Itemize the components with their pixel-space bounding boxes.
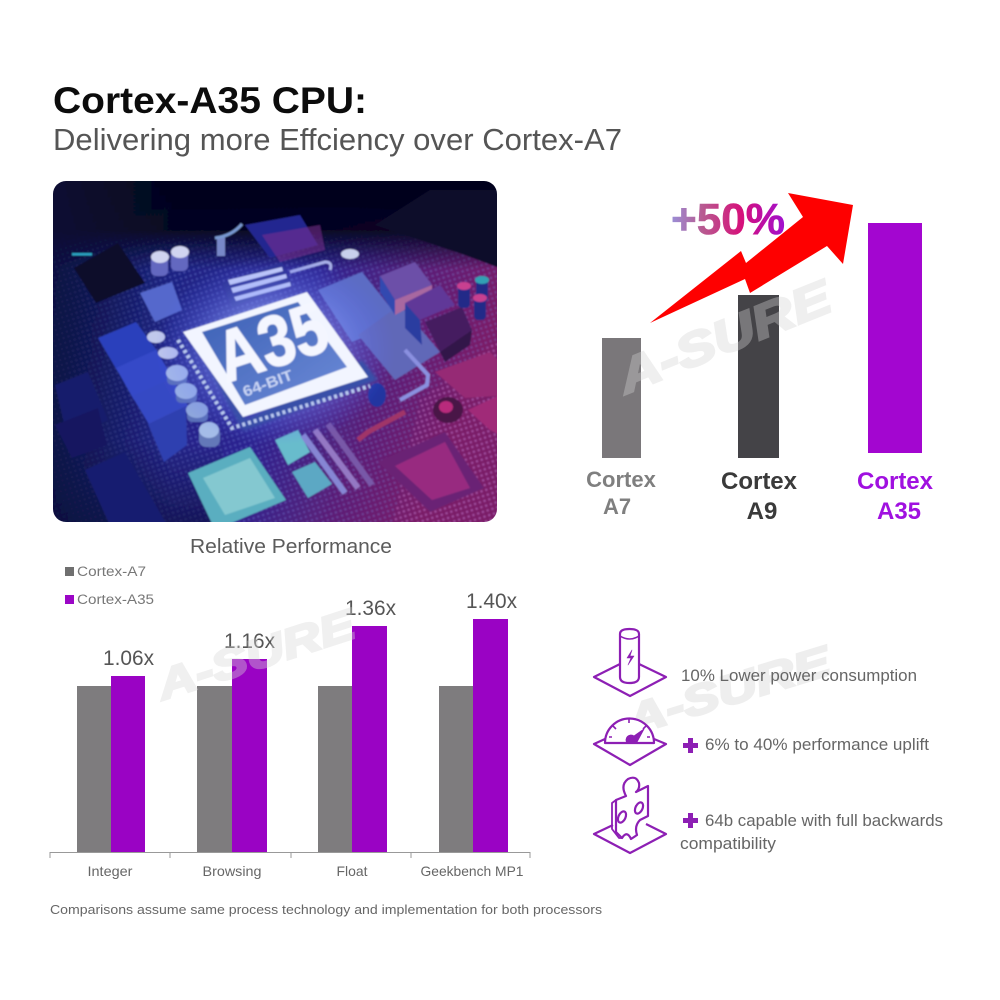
watermark top: A-SURE (609, 269, 840, 404)
label: Cortex A9 (721, 468, 798, 525)
watermark bottom left: A-SURE (150, 600, 363, 709)
chip frame (183, 292, 368, 417)
heat sinks right of chip (318, 272, 402, 342)
transistor (368, 383, 386, 407)
chart title: Relative Performance (190, 536, 392, 558)
teal chip bottom (188, 447, 286, 530)
label: Cortex A7: Cortex (586, 467, 657, 492)
text: lower power: 10% Lower power consumption (681, 667, 917, 685)
pink right chips (435, 352, 497, 398)
group: Integer bars (77, 647, 154, 852)
illustration: A35 circuit board (53, 181, 497, 522)
icon: battery (594, 629, 666, 696)
chip pins (178, 340, 370, 428)
chip glow (162, 260, 384, 438)
capacitors top (151, 246, 189, 276)
top right dark block (376, 190, 497, 268)
label: Cortex A35: A35 (877, 498, 921, 525)
small block (140, 282, 182, 322)
text: performance uplift: 6% to 40% performance uplift (705, 736, 929, 754)
group: Geekbench bars (439, 590, 517, 852)
label: Cortex A7: A7 (603, 494, 631, 519)
chip label A35: A35 (206, 288, 338, 398)
label: Cortex A9: Cortex (721, 468, 798, 495)
axis labels: Float (336, 863, 368, 879)
title: Cortex-A35 CPU: (53, 80, 367, 121)
legend: Cortex-A7: Cortex-A7 (77, 564, 146, 579)
bar: Cortex A9 (738, 295, 779, 458)
group: Geekbench bars: 1.40x (466, 590, 517, 613)
arrow: +50% rising (650, 193, 853, 323)
connector bottom (303, 350, 428, 493)
watermark right: A-SURE (620, 637, 838, 744)
text: 64b capable: compatibility (680, 835, 777, 853)
axis labels: Browsing (202, 863, 262, 879)
text: 64b capable (680, 812, 943, 853)
CPU chip (183, 288, 378, 431)
icon: puzzle piece (594, 778, 666, 853)
label: Cortex A9: A9 (747, 498, 777, 525)
group: Browsing bars (197, 630, 275, 852)
left inductors (98, 322, 188, 462)
label: Cortex A7 (586, 467, 657, 519)
icon: gauge (594, 718, 666, 765)
label: Cortex A35: Cortex (857, 468, 934, 495)
striped vents (245, 215, 318, 258)
small chips bottom (275, 430, 310, 465)
right pink capacitors (457, 276, 489, 320)
subtitle: Delivering more Effciency over Cortex-A7 (53, 122, 622, 157)
+50% label: +50% (671, 195, 785, 244)
chip face (202, 302, 347, 405)
left dark chip (74, 243, 145, 303)
label: Cortex A35 (857, 468, 934, 525)
group: Browsing bars: 1.16x (224, 630, 275, 653)
bar: Cortex A35 (868, 223, 922, 453)
axis labels: Integer (88, 863, 133, 879)
chart: relative performance (50, 536, 530, 879)
bar: Cortex A7 (602, 338, 641, 458)
chip label 64-BIT: 64-BIT (241, 367, 295, 401)
group: Float bars (318, 597, 396, 852)
left low panels (54, 372, 107, 422)
bar chart: Cortex comparison (586, 223, 934, 525)
icon: plus (683, 738, 698, 753)
cubes (380, 262, 472, 362)
legend: Cortex-A35: Cortex-A35 (77, 592, 154, 607)
text: 64b capable: 64b capable with full backwards (705, 812, 943, 830)
footnote: Comparisons assume same process technology and implementation for both processors (50, 902, 603, 917)
axis labels: Geekbench MP1 (420, 863, 524, 879)
group: Integer bars: 1.06x (103, 647, 154, 670)
group: Float bars: 1.36x (345, 597, 396, 620)
axis labels (88, 863, 524, 879)
memory slot top (215, 224, 359, 307)
capacitors left column (147, 331, 220, 447)
icon: plus (683, 813, 698, 828)
pink chip bottom right (378, 432, 484, 512)
